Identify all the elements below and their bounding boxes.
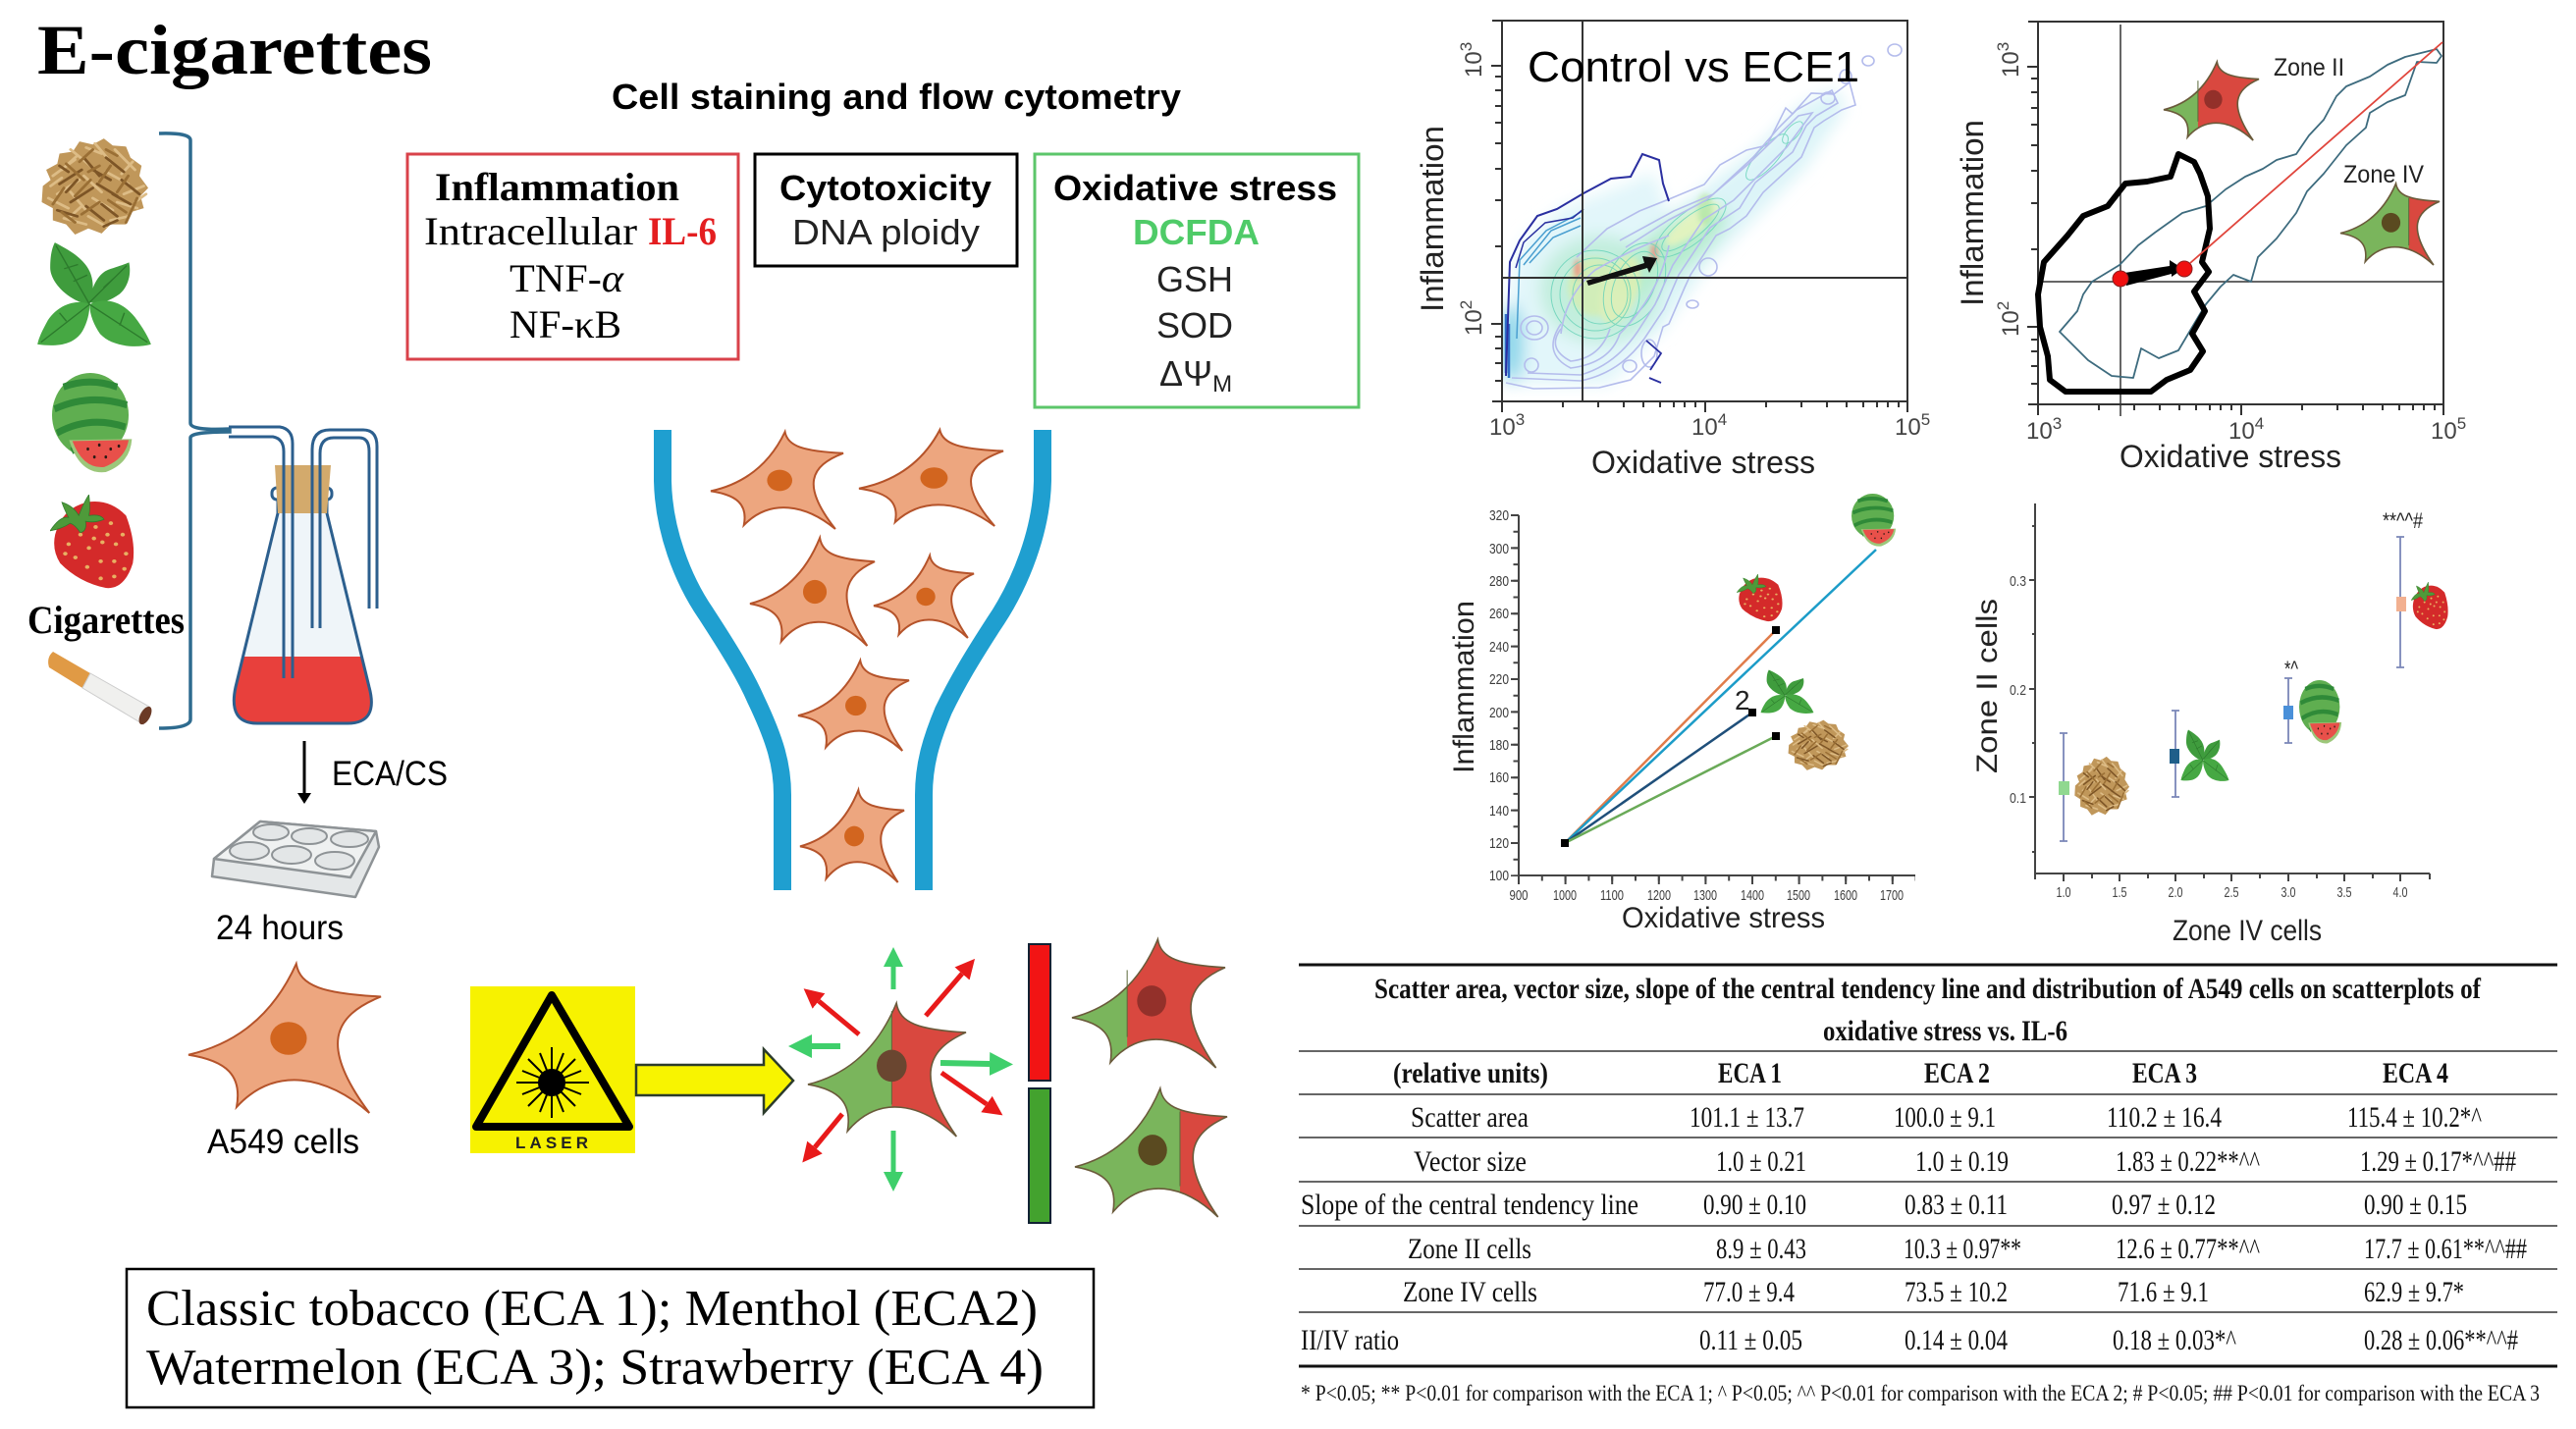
row: zone IV: 73.5 ± 10.2 bbox=[1905, 1276, 2008, 1308]
box: cytotoxicity bbox=[755, 154, 1017, 266]
tick labels: 10 bbox=[1691, 414, 1718, 441]
box: cytotoxicity: DNA ploidy bbox=[792, 212, 980, 252]
icon: tobacco bbox=[42, 138, 148, 235]
row: zone II: Zone II cells bbox=[1408, 1233, 1531, 1265]
row: vector size: 1.0 ± 0.21 bbox=[1716, 1145, 1806, 1178]
box: oxidative stress: DCFDA bbox=[1133, 212, 1260, 252]
x tick labels: 1400 bbox=[1741, 887, 1764, 904]
x tick labels: 1500 bbox=[1787, 887, 1810, 904]
row: scatter area: Scatter area bbox=[1411, 1101, 1529, 1134]
row: zone IV: Zone IV cells bbox=[1403, 1276, 1537, 1308]
tick labels: 10 bbox=[1489, 414, 1516, 441]
row: vector size: Vector size bbox=[1414, 1145, 1527, 1178]
tick labels: 10 bbox=[1895, 414, 1921, 441]
row: zone IV: 77.0 ± 9.4 bbox=[1703, 1276, 1795, 1308]
icon: tobacco bbox=[1789, 720, 1849, 770]
vector arrow and points bbox=[2113, 260, 2192, 287]
x tick labels: 1100 bbox=[1600, 887, 1624, 904]
y axis label: Inflammation bbox=[1448, 601, 1480, 773]
tick labels: 3 bbox=[1994, 42, 2012, 51]
icon: A549 cell bbox=[188, 964, 381, 1113]
label: ECA/CS: ECA/CS bbox=[332, 755, 448, 793]
legend box: Watermelon (ECA 3); Strawberry (ECA 4) bbox=[146, 1340, 1044, 1396]
x tick labels: 1.0 bbox=[2056, 884, 2071, 901]
tick labels: 3 bbox=[1516, 410, 1525, 429]
row: zone II: 12.6 ± 0.77**^^ bbox=[2116, 1233, 2260, 1265]
icon: watermelon bbox=[1852, 494, 1896, 547]
y tick labels: 0.3 bbox=[2010, 573, 2026, 590]
x axis label: Oxidative stress bbox=[2120, 439, 2341, 474]
row: ratio: 0.11 ± 0.05 bbox=[1699, 1324, 1802, 1356]
tick labels: 10 bbox=[1998, 310, 2024, 337]
vector lines bbox=[1561, 550, 1876, 847]
x tick labels: 3.0 bbox=[2281, 884, 2295, 901]
x tick labels: 1600 bbox=[1834, 887, 1857, 904]
arrow: vector shift bbox=[1586, 256, 1657, 286]
title: E-cigarettes bbox=[37, 11, 432, 89]
chart: contour plot control vs ECE1 bbox=[1415, 21, 1930, 480]
y axis label: Inflammation bbox=[1415, 126, 1450, 312]
icon: strawberry bbox=[2411, 582, 2448, 629]
arrow: exposure bbox=[297, 741, 311, 804]
box: inflammation: Intracellular bbox=[424, 209, 637, 253]
legend box bbox=[127, 1269, 1094, 1407]
icon: mint bbox=[37, 242, 151, 346]
label: cigarettes: Cigarettes bbox=[27, 598, 185, 642]
y tick labels: 280 bbox=[1489, 573, 1509, 590]
row: vector size: 1.0 ± 0.19 bbox=[1915, 1145, 2009, 1178]
box: oxidative stress: M bbox=[1212, 371, 1232, 397]
row: slope: 0.83 ± 0.11 bbox=[1905, 1189, 2008, 1221]
x tick labels: 2.0 bbox=[2168, 884, 2183, 901]
brace bbox=[159, 133, 230, 728]
x tick labels: 1200 bbox=[1647, 887, 1671, 904]
significance marks bbox=[2284, 508, 2424, 681]
row: ratio: 0.14 ± 0.04 bbox=[1905, 1324, 2008, 1356]
x tick labels: 1300 bbox=[1693, 887, 1717, 904]
thin scatter contour bbox=[2060, 49, 2442, 378]
cell being scattered bbox=[808, 1003, 966, 1137]
x axis label: Oxidative stress bbox=[1591, 445, 1815, 480]
x tick labels: 2.5 bbox=[2225, 884, 2238, 901]
chart: vectors by flavour bbox=[1448, 494, 1915, 934]
table header: ECA 3 bbox=[2132, 1057, 2197, 1089]
row: zone II: 10.3 ± 0.97** bbox=[1904, 1233, 2021, 1265]
tick labels: 5 bbox=[2457, 414, 2466, 433]
row: vector size: 1.83 ± 0.22**^^ bbox=[2116, 1145, 2260, 1178]
box: inflammation: Inflammation bbox=[435, 165, 679, 209]
icon: six-well plate bbox=[212, 821, 379, 897]
box: inflammation: TNF-α bbox=[510, 256, 624, 300]
box: oxidative stress: Oxidative stress bbox=[1053, 168, 1337, 208]
row: ratio: 0.28 ± 0.06**^^# bbox=[2364, 1324, 2518, 1356]
tick labels: 4 bbox=[2255, 414, 2264, 433]
zone II bbox=[2164, 54, 2344, 140]
zone II: Zone II bbox=[2274, 54, 2344, 81]
row: scatter area: 100.0 ± 9.1 bbox=[1894, 1101, 1996, 1134]
y tick labels: 180 bbox=[1489, 737, 1509, 754]
row: zone IV: 71.6 ± 9.1 bbox=[2118, 1276, 2209, 1308]
table title bbox=[1374, 973, 2482, 1047]
central tendency line bbox=[2190, 42, 2442, 263]
x axis label: Oxidative stress bbox=[1622, 902, 1825, 934]
x axis label: Zone IV cells bbox=[2173, 915, 2322, 947]
x tick labels: 1700 bbox=[1880, 887, 1904, 904]
row: slope bbox=[1301, 1189, 2467, 1221]
row: scatter area: 101.1 ± 13.7 bbox=[1690, 1101, 1804, 1134]
table title: oxidative stress vs. IL-6 bbox=[1823, 1015, 2067, 1047]
x tick labels: 900 bbox=[1510, 887, 1528, 904]
y tick labels: 140 bbox=[1489, 803, 1509, 820]
cells in stream bbox=[711, 430, 1003, 882]
plot title: Control vs ECE1 bbox=[1528, 43, 1859, 91]
y tick labels: 0.2 bbox=[2010, 682, 2026, 699]
panel: flavours and smoke source bbox=[27, 133, 230, 728]
icon: laser warning sign: LASER bbox=[515, 1134, 588, 1152]
row: zone IV: 62.9 ± 9.7* bbox=[2364, 1276, 2464, 1308]
axes bbox=[1491, 21, 1907, 412]
table header bbox=[1393, 1057, 2448, 1089]
tick labels: 10 bbox=[1461, 309, 1487, 336]
funnel with cells bbox=[663, 430, 1043, 890]
tick labels bbox=[1457, 42, 1930, 441]
table header: (relative units) bbox=[1393, 1057, 1548, 1089]
icon: flask with tubes bbox=[229, 427, 377, 723]
y tick labels bbox=[1489, 507, 1509, 884]
row: slope: Slope of the central tendency line bbox=[1301, 1189, 1638, 1221]
x tick labels bbox=[2056, 884, 2407, 901]
error bars and markers bbox=[2059, 537, 2406, 841]
box: inflammation: NF-κB bbox=[510, 302, 621, 346]
row: zone IV bbox=[1403, 1276, 2464, 1308]
significance marks: **^^# bbox=[2383, 508, 2424, 533]
icon: green dominant cell bbox=[1075, 1088, 1227, 1217]
chart: zone schematic bbox=[1955, 22, 2466, 474]
tick labels: 10 bbox=[1998, 51, 2024, 78]
icon: laser warning sign bbox=[470, 986, 635, 1153]
x tick labels bbox=[1510, 887, 1904, 904]
row: slope: 0.90 ± 0.10 bbox=[1703, 1189, 1806, 1221]
row: ratio: 0.18 ± 0.03*^ bbox=[2113, 1324, 2236, 1356]
table header: ECA 1 bbox=[1718, 1057, 1782, 1089]
y tick labels: 300 bbox=[1489, 541, 1509, 557]
icon: mint bbox=[2181, 730, 2228, 781]
box: inflammation bbox=[407, 154, 738, 359]
box: oxidative stress: SOD bbox=[1156, 305, 1233, 345]
icon: cigarette bbox=[48, 652, 154, 726]
icon: watermelon bbox=[2299, 680, 2341, 744]
label: A549 cells: A549 cells bbox=[207, 1123, 359, 1161]
tick labels: 3 bbox=[1457, 42, 1476, 51]
row: zone II bbox=[1408, 1233, 2527, 1265]
contour density bbox=[1500, 44, 1902, 389]
y tick labels: 240 bbox=[1489, 639, 1509, 656]
x tick labels: 1000 bbox=[1553, 887, 1577, 904]
chart: II/IV ratio bbox=[1971, 503, 2448, 947]
table: scatter metrics bbox=[1299, 965, 2557, 1405]
y tick labels: 260 bbox=[1489, 606, 1509, 622]
table header: ECA 4 bbox=[2383, 1057, 2448, 1089]
y tick labels: 100 bbox=[1489, 868, 1509, 884]
box: oxidative stress: GSH bbox=[1156, 259, 1233, 299]
axes bbox=[2029, 503, 2430, 881]
row: vector size: 1.29 ± 0.17*^^## bbox=[2360, 1145, 2516, 1178]
significance marks: *^ bbox=[2284, 657, 2298, 681]
scatter arrows bbox=[812, 967, 990, 1172]
icon: red dominant cell bbox=[1072, 939, 1225, 1068]
axes bbox=[1515, 514, 1915, 880]
row: slope: 0.90 ± 0.15 bbox=[2364, 1189, 2467, 1221]
icon: watermelon bbox=[52, 373, 132, 472]
tick labels: 10 bbox=[1461, 51, 1487, 78]
row: scatter area bbox=[1411, 1101, 2482, 1134]
label: 24 hours: 24 hours bbox=[216, 909, 344, 947]
tick labels bbox=[1994, 42, 2466, 445]
tick labels: 2 bbox=[1994, 301, 2012, 310]
icon: mint bbox=[1761, 669, 1813, 714]
tick labels: 3 bbox=[2053, 414, 2062, 433]
box: oxidative stress bbox=[1035, 154, 1359, 407]
arrow: laser beam bbox=[636, 1049, 793, 1113]
tick labels: 10 bbox=[2228, 418, 2255, 445]
x tick labels: 3.5 bbox=[2336, 884, 2352, 901]
tick labels: 4 bbox=[1718, 410, 1727, 429]
icon: strawberry bbox=[50, 495, 134, 588]
row: scatter area: 110.2 ± 16.4 bbox=[2107, 1101, 2222, 1134]
y tick labels bbox=[2010, 573, 2026, 807]
tick labels: 10 bbox=[2431, 418, 2457, 445]
row: vector size bbox=[1414, 1145, 2516, 1178]
icon: tobacco bbox=[2074, 757, 2129, 816]
y axis label: Zone II cells bbox=[1971, 599, 2004, 773]
box: inflammation: IL-6 bbox=[648, 209, 717, 253]
y tick labels: 0.1 bbox=[2010, 790, 2026, 807]
row: ratio bbox=[1301, 1324, 2518, 1356]
tick labels: 10 bbox=[2026, 418, 2053, 445]
y tick labels: 160 bbox=[1489, 769, 1509, 786]
row: ratio: II/IV ratio bbox=[1301, 1324, 1399, 1356]
y tick labels: 320 bbox=[1489, 507, 1509, 524]
y tick labels: 200 bbox=[1489, 705, 1509, 721]
y tick labels: 220 bbox=[1489, 671, 1509, 688]
zone IV bbox=[2340, 161, 2440, 265]
box: cytotoxicity: Cytotoxicity bbox=[779, 168, 992, 208]
row: scatter area: 115.4 ± 10.2*^ bbox=[2347, 1101, 2482, 1134]
tick labels: 2 bbox=[1457, 300, 1476, 309]
icon: strawberry bbox=[1737, 574, 1783, 621]
box: oxidative stress: ΔΨ bbox=[1159, 353, 1212, 394]
row: slope: 0.97 ± 0.12 bbox=[2112, 1189, 2216, 1221]
zone IV: Zone IV bbox=[2343, 161, 2424, 188]
y tick labels: 120 bbox=[1489, 835, 1509, 852]
heading: cell staining: Cell staining and flow cytometry bbox=[612, 77, 1181, 117]
thick control contour bbox=[2038, 154, 2210, 392]
tick labels: 5 bbox=[1921, 410, 1930, 429]
x tick labels: 4.0 bbox=[2393, 884, 2407, 901]
table header: ECA 2 bbox=[1924, 1057, 1990, 1089]
stray label: 2 bbox=[1735, 685, 1750, 715]
row: zone II: 8.9 ± 0.43 bbox=[1716, 1233, 1806, 1265]
legend box: Classic tobacco (ECA 1); Menthol (ECA2) bbox=[146, 1281, 1038, 1337]
x tick labels: 1.5 bbox=[2113, 884, 2126, 901]
funnel walls bbox=[663, 430, 1043, 890]
axes bbox=[2027, 22, 2443, 416]
y axis label: Inflammation bbox=[1955, 120, 1990, 306]
detector bars bbox=[1029, 944, 1050, 1223]
